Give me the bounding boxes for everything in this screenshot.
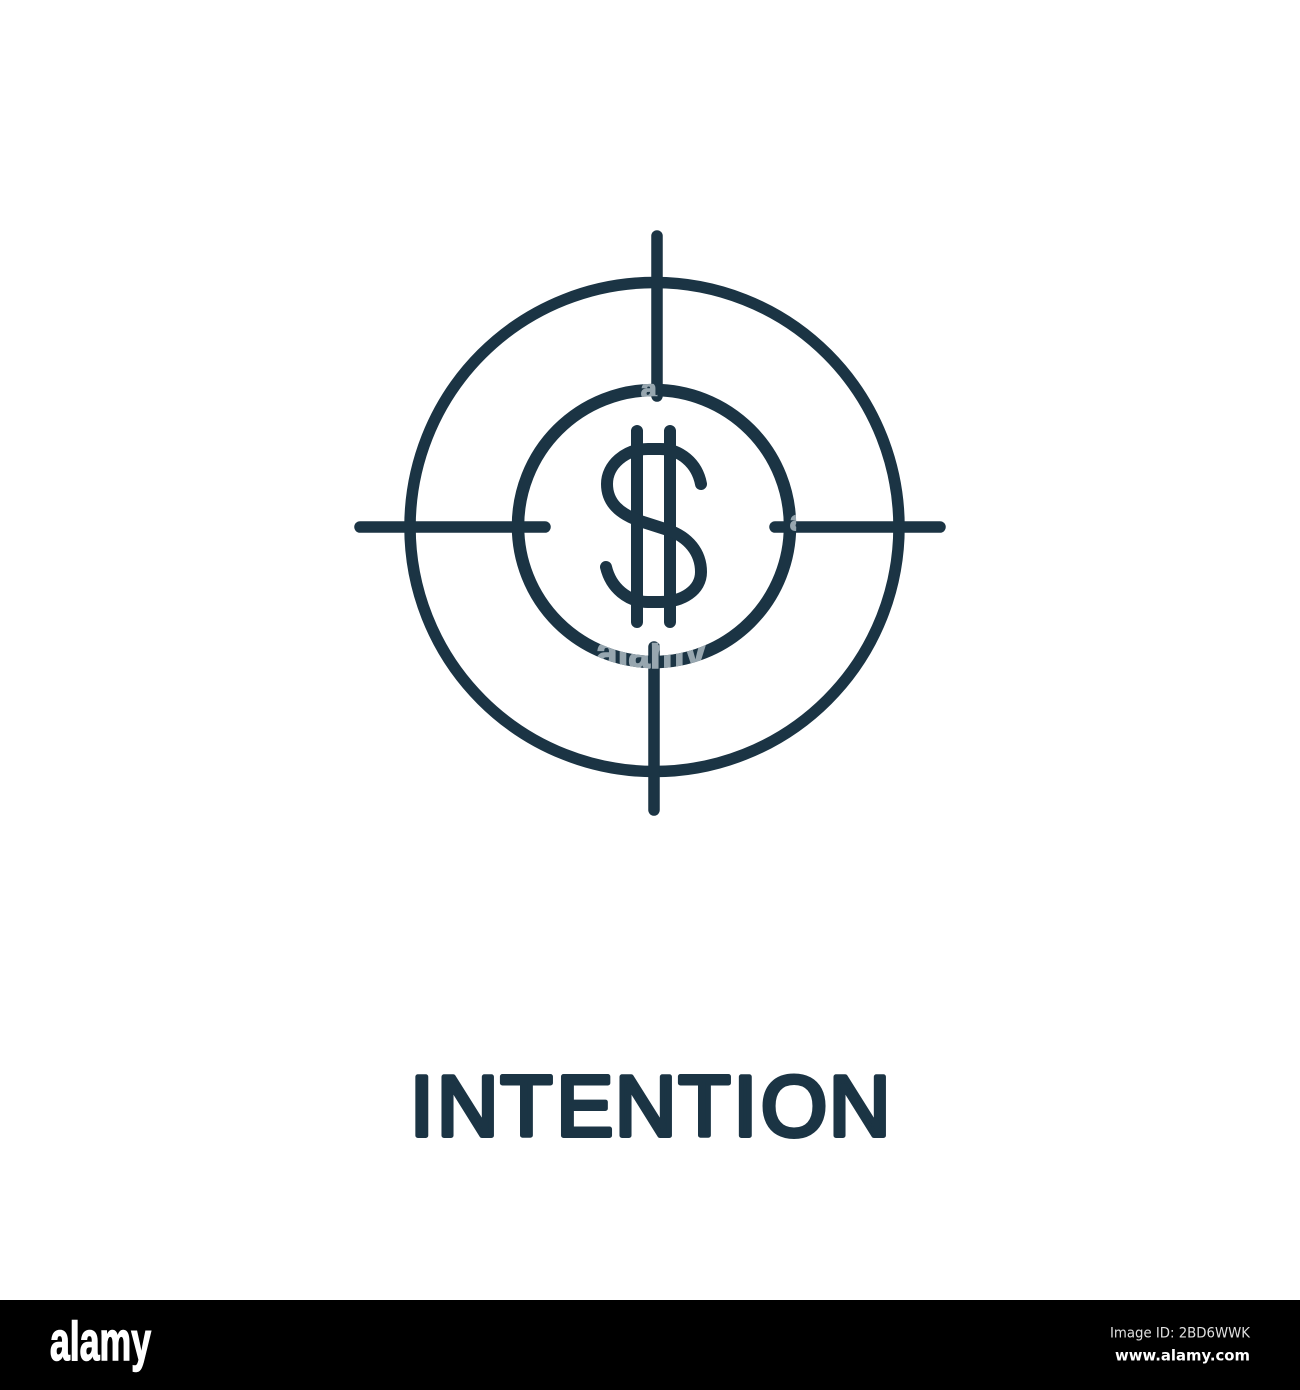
crosshair: top tick — [651, 236, 663, 396]
footer text: website: www.alamy.com — [1115, 1346, 1250, 1364]
dollar sign: vertical bars — [637, 431, 670, 622]
icon: target crosshair with dollar sign — [360, 236, 940, 810]
heading: INTENTION: INTENTION — [410, 1060, 890, 1154]
outer target ring — [410, 282, 899, 772]
crosshair: left tick — [360, 521, 545, 533]
dollar sign: S curve — [606, 449, 701, 602]
watermark fragments on rings: a — [790, 505, 806, 536]
watermark fragments on rings: alamy — [596, 626, 706, 678]
footer logo: alamy: alamy — [50, 1310, 151, 1372]
footer text: image id: Image ID: 2BD6WWK — [1110, 1326, 1250, 1342]
watermark fragments on rings: a — [641, 373, 657, 404]
crosshair: right tick — [775, 521, 940, 533]
crosshair: bottom tick — [648, 647, 660, 810]
watermark fragments on rings — [597, 384, 796, 669]
footer bar — [0, 1300, 1300, 1390]
inner target ring — [518, 390, 790, 662]
dollar sign — [606, 431, 701, 622]
